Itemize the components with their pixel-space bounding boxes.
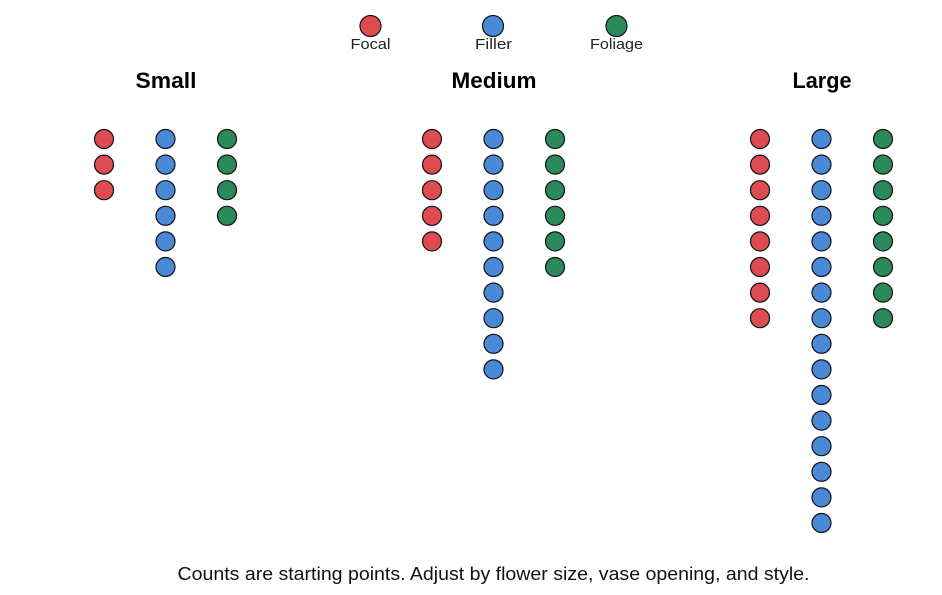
medium focal dots [422, 130, 442, 251]
heading: small: Small [136, 68, 196, 93]
large focal dots [750, 130, 770, 328]
small focal dots [94, 130, 114, 200]
small filler dots [156, 130, 175, 276]
large filler dots [812, 130, 831, 532]
medium filler dots [484, 130, 503, 379]
panel: large [750, 68, 892, 532]
legend: filler [475, 16, 512, 53]
legend: filler: Filler [475, 36, 512, 53]
legend: foliage: Foliage [590, 36, 643, 53]
small foliage dots [218, 130, 236, 225]
legend: focal: Focal [350, 36, 390, 53]
panel: small [94, 68, 236, 276]
legend: focal [350, 16, 390, 53]
legend: foliage [590, 16, 643, 53]
legend [350, 16, 643, 53]
large foliage dots [874, 130, 892, 328]
heading: medium: Medium [452, 68, 536, 93]
panel: medium [422, 68, 564, 379]
footnote: Counts are starting points. Adjust by flower size, vase opening, and style. [178, 564, 810, 584]
medium foliage dots [546, 130, 564, 276]
heading: large: Large [792, 68, 852, 93]
